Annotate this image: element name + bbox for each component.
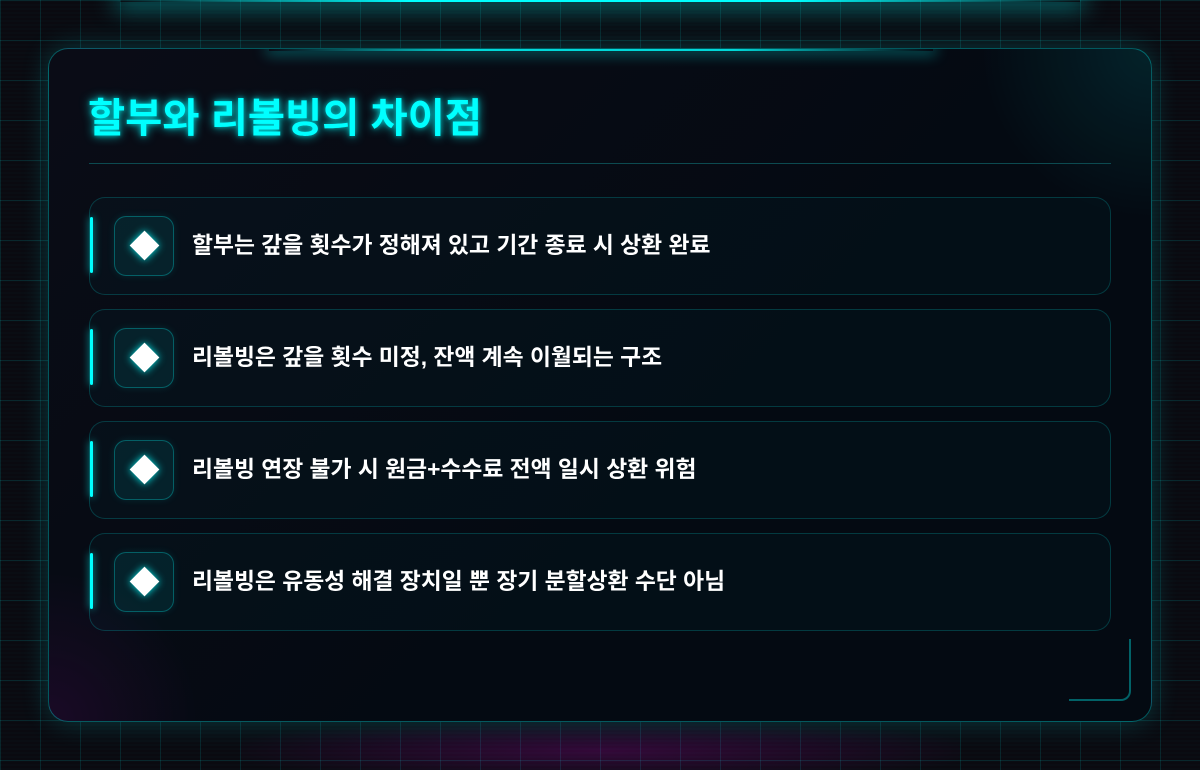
text: item 1: 할부는 갚을 횟수가 정해져 있고 기간 종료 시 상환 완료	[192, 232, 710, 258]
list item 2	[89, 309, 1111, 407]
decorative corner bracket	[1069, 639, 1131, 701]
icon: diamond 3	[114, 440, 174, 500]
icon: diamond 2	[114, 328, 174, 388]
list item 3	[89, 421, 1111, 519]
icon: diamond 1	[114, 216, 174, 276]
text: item 3: 리볼빙 연장 불가 시 원금+수수료 전액 일시 상환 위험	[192, 456, 696, 482]
list item 4	[89, 533, 1111, 631]
title: 할부와 리볼빙의 차이점	[88, 95, 482, 141]
text: item 4: 리볼빙은 유동성 해결 장치일 뿐 장기 분할상환 수단 아님	[192, 568, 725, 594]
icon: diamond 4	[114, 552, 174, 612]
text: item 2: 리볼빙은 갚을 횟수 미정, 잔액 계속 이월되는 구조	[192, 344, 662, 370]
list item 1	[89, 197, 1111, 295]
